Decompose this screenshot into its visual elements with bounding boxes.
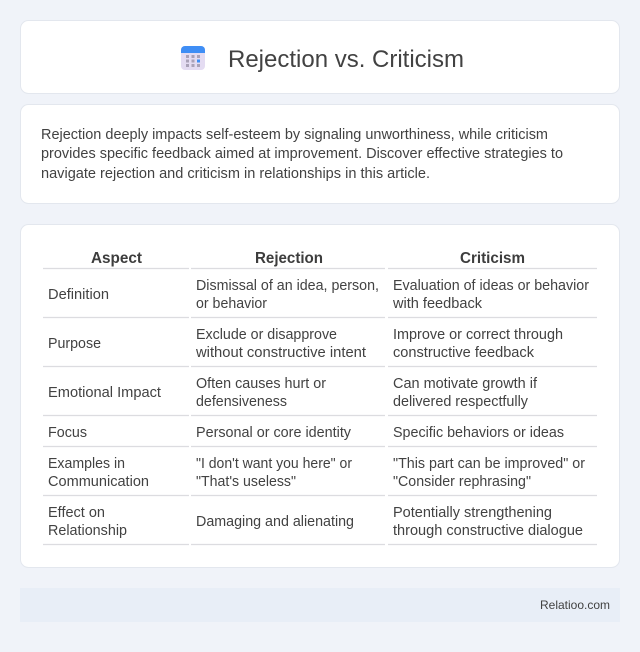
table row: examples in communication: "Consider rephrasing" <box>393 474 531 490</box>
table row: purpose: Improve or correct through <box>393 327 563 343</box>
text block: introduction: navigate rejection and criticism in relationships in this article. <box>41 166 430 182</box>
table row: definition: or behavior <box>196 296 267 312</box>
table row: examples in communication: Examples in <box>48 456 125 472</box>
table header <box>91 250 525 267</box>
table row: definition <box>48 278 589 312</box>
table row: focus <box>48 425 564 441</box>
table row: effect on relationship: Damaging and alienating <box>196 514 354 530</box>
table row: purpose <box>48 327 563 361</box>
text block: introduction: provides specific feedback aimed at improvement. Discover effective strategies to <box>41 146 563 162</box>
table header: Criticism <box>460 250 525 267</box>
text block: introduction <box>41 127 563 182</box>
table row: examples in communication: "I don't want you here" or <box>196 456 352 472</box>
panel: comparison table <box>20 224 620 568</box>
table row: examples in communication: "That's useless" <box>196 474 296 490</box>
table row: focus: Personal or core identity <box>196 425 352 441</box>
table row: emotional impact <box>48 376 538 410</box>
table row: focus: Focus <box>48 425 87 441</box>
table row: emotional impact: Emotional Impact <box>48 385 161 401</box>
table row: definition: Definition <box>48 287 109 303</box>
table row: purpose: Exclude or disapprove <box>196 327 337 343</box>
table row: emotional impact: Often causes hurt or <box>196 376 326 392</box>
table row: effect on relationship <box>48 505 583 539</box>
text block: introduction: Rejection deeply impacts self-esteem by signaling unworthiness, while criticism <box>41 127 548 143</box>
icon: calendar <box>181 46 205 70</box>
table row: purpose: Purpose <box>48 336 101 352</box>
table header: Aspect <box>91 250 143 267</box>
table row: purpose: without constructive intent <box>195 345 366 361</box>
panel: title header <box>20 20 620 94</box>
table row: purpose: constructive feedback <box>393 345 535 361</box>
table row: focus: Specific behaviors or ideas <box>393 425 564 441</box>
title: Rejection vs. Criticism <box>228 46 464 73</box>
table row: examples in communication <box>48 456 585 490</box>
table row: examples in communication: Communication <box>48 474 149 490</box>
table row: definition: Dismissal of an idea, person, <box>196 278 379 294</box>
table row: emotional impact: delivered respectfully <box>393 394 529 410</box>
table header: Rejection <box>255 250 323 267</box>
table row: effect on relationship: Effect on <box>48 505 105 521</box>
table row: emotional impact: defensiveness <box>196 394 287 410</box>
table row: effect on relationship: through constructive dialogue <box>393 523 583 539</box>
table row: effect on relationship: Relationship <box>48 523 127 539</box>
footer: Relatioo.com <box>540 598 610 612</box>
table row: definition: with feedback <box>392 296 483 312</box>
table row: definition: Evaluation of ideas or behavior <box>393 278 589 294</box>
table row: emotional impact: Can motivate growth if <box>393 376 538 392</box>
panel: introduction <box>20 104 620 204</box>
table row: effect on relationship: Potentially strengthening <box>393 505 552 521</box>
footer <box>20 588 620 622</box>
table row: examples in communication: "This part can be improved" or <box>393 456 585 472</box>
